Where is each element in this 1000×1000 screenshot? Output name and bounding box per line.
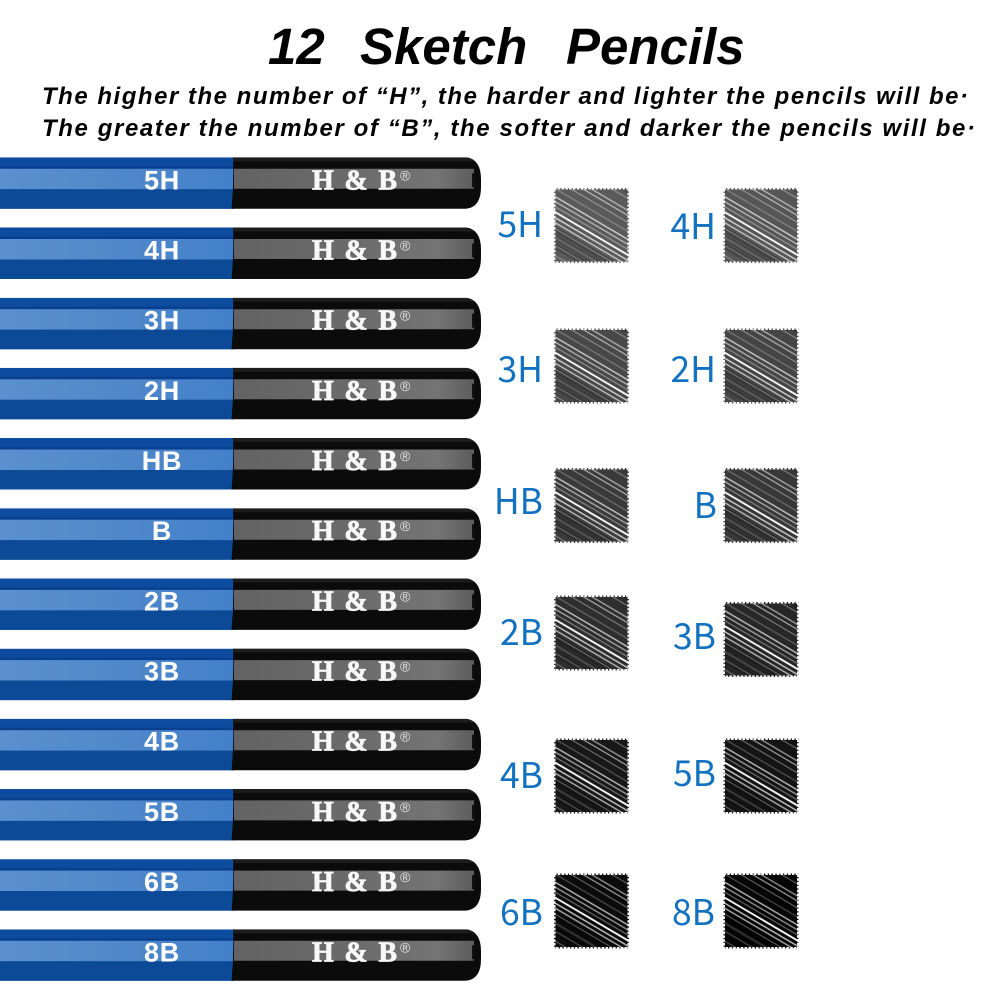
pencil: 3H: [0, 298, 482, 350]
pencil: 3B: [0, 649, 482, 701]
pencil: 5H: [0, 157, 482, 209]
brand: H & B: [312, 657, 397, 688]
swatch: B: B: [694, 478, 717, 529]
grade label: 3B: [144, 657, 180, 687]
brand: H & B: [312, 727, 397, 758]
title: 12: [268, 18, 325, 75]
swatch: 6B: [500, 824, 639, 990]
pencil: 2H: [0, 368, 482, 420]
registered mark: ®: [400, 588, 411, 604]
swatch: 3H: 3H: [497, 342, 543, 393]
pencil: 2B: [0, 578, 482, 630]
pencil: 6B: [0, 859, 482, 911]
swatch: 4B: [500, 688, 639, 856]
shading sample: [718, 824, 808, 990]
panel: pencils: [0, 157, 482, 981]
brand: H & B: [312, 516, 397, 547]
grade label: HB: [142, 446, 182, 476]
brand: H & B: [312, 937, 397, 968]
shading sample: [549, 138, 639, 305]
title: Pencils: [566, 18, 745, 75]
swatch: 8B: [672, 824, 808, 990]
grade label: B: [152, 516, 172, 546]
pencil: B: [0, 508, 482, 560]
registered mark: ®: [400, 939, 411, 955]
shading sample: [549, 278, 639, 446]
swatch: 3B: 3B: [673, 609, 716, 660]
pencil: 5B: [0, 789, 482, 841]
registered mark: ®: [400, 308, 411, 324]
brand: H & B: [312, 797, 397, 828]
swatch: 8B: 8B: [672, 885, 715, 936]
pencil: 8B: [0, 929, 482, 981]
panel: shading swatches: [494, 138, 808, 990]
shading sample: [549, 688, 639, 856]
brand: H & B: [312, 446, 397, 477]
subtitle: B grade explanation: The greater the number of “B”, the softer and darker the pencils will be·: [42, 115, 975, 142]
shading sample: [718, 552, 808, 719]
grade label: 2B: [144, 586, 180, 616]
registered mark: ®: [400, 518, 411, 534]
registered mark: ®: [400, 869, 411, 885]
swatch: B: [694, 418, 808, 585]
grade label: 4H: [144, 236, 180, 266]
swatch: 4H: [670, 138, 808, 305]
pencil: HB: [0, 438, 482, 490]
registered mark: ®: [400, 729, 411, 745]
grade label: 8B: [144, 937, 180, 967]
brand: H & B: [312, 376, 397, 407]
grade label: 2H: [144, 376, 180, 406]
registered mark: ®: [400, 378, 411, 394]
shading sample: [718, 688, 808, 856]
grade label: 5H: [144, 165, 180, 195]
shading sample: [549, 418, 639, 585]
registered mark: ®: [400, 659, 411, 675]
swatch: 4H: 4H: [670, 199, 716, 250]
swatch: HB: [494, 418, 639, 585]
swatch: 5B: 5B: [673, 746, 716, 797]
brand: H & B: [312, 867, 397, 898]
swatch: 2H: 2H: [670, 342, 716, 393]
grade label: 6B: [144, 867, 180, 897]
subtitle: H grade explanation: The higher the number of “H”, the harder and lighter the pencils will be·: [42, 83, 968, 110]
grade label: 4B: [144, 727, 180, 757]
swatch: 2B: 2B: [500, 605, 543, 656]
swatch: 6B: 6B: [500, 885, 543, 936]
swatch: 3H: [497, 278, 639, 446]
shading sample: [718, 278, 808, 446]
swatch: 2B: [500, 546, 639, 712]
swatch: 5H: 5H: [497, 197, 543, 248]
brand: H & B: [312, 236, 397, 266]
brand: H & B: [312, 586, 397, 617]
grade label: 3H: [144, 306, 180, 336]
shading sample: [718, 418, 808, 585]
registered mark: ®: [400, 167, 411, 183]
swatch: 4B: 4B: [500, 748, 543, 799]
swatch: 5H: [497, 138, 639, 305]
shading sample: [549, 546, 639, 712]
swatch: 5B: [673, 688, 808, 856]
brand: H & B: [312, 306, 397, 337]
title: Sketch: [360, 18, 527, 75]
pencil: 4H: [0, 228, 482, 280]
swatch: 3B: [673, 552, 808, 719]
brand: H & B: [312, 165, 397, 196]
shading sample: [718, 138, 808, 305]
registered mark: ®: [400, 238, 411, 254]
pencil: 4B: [0, 719, 482, 771]
swatch: 2H: [670, 278, 808, 446]
registered mark: ®: [400, 799, 411, 815]
registered mark: ®: [400, 448, 411, 464]
grade label: 5B: [144, 797, 180, 827]
shading sample: [549, 824, 639, 990]
swatch: HB: HB: [494, 474, 543, 525]
